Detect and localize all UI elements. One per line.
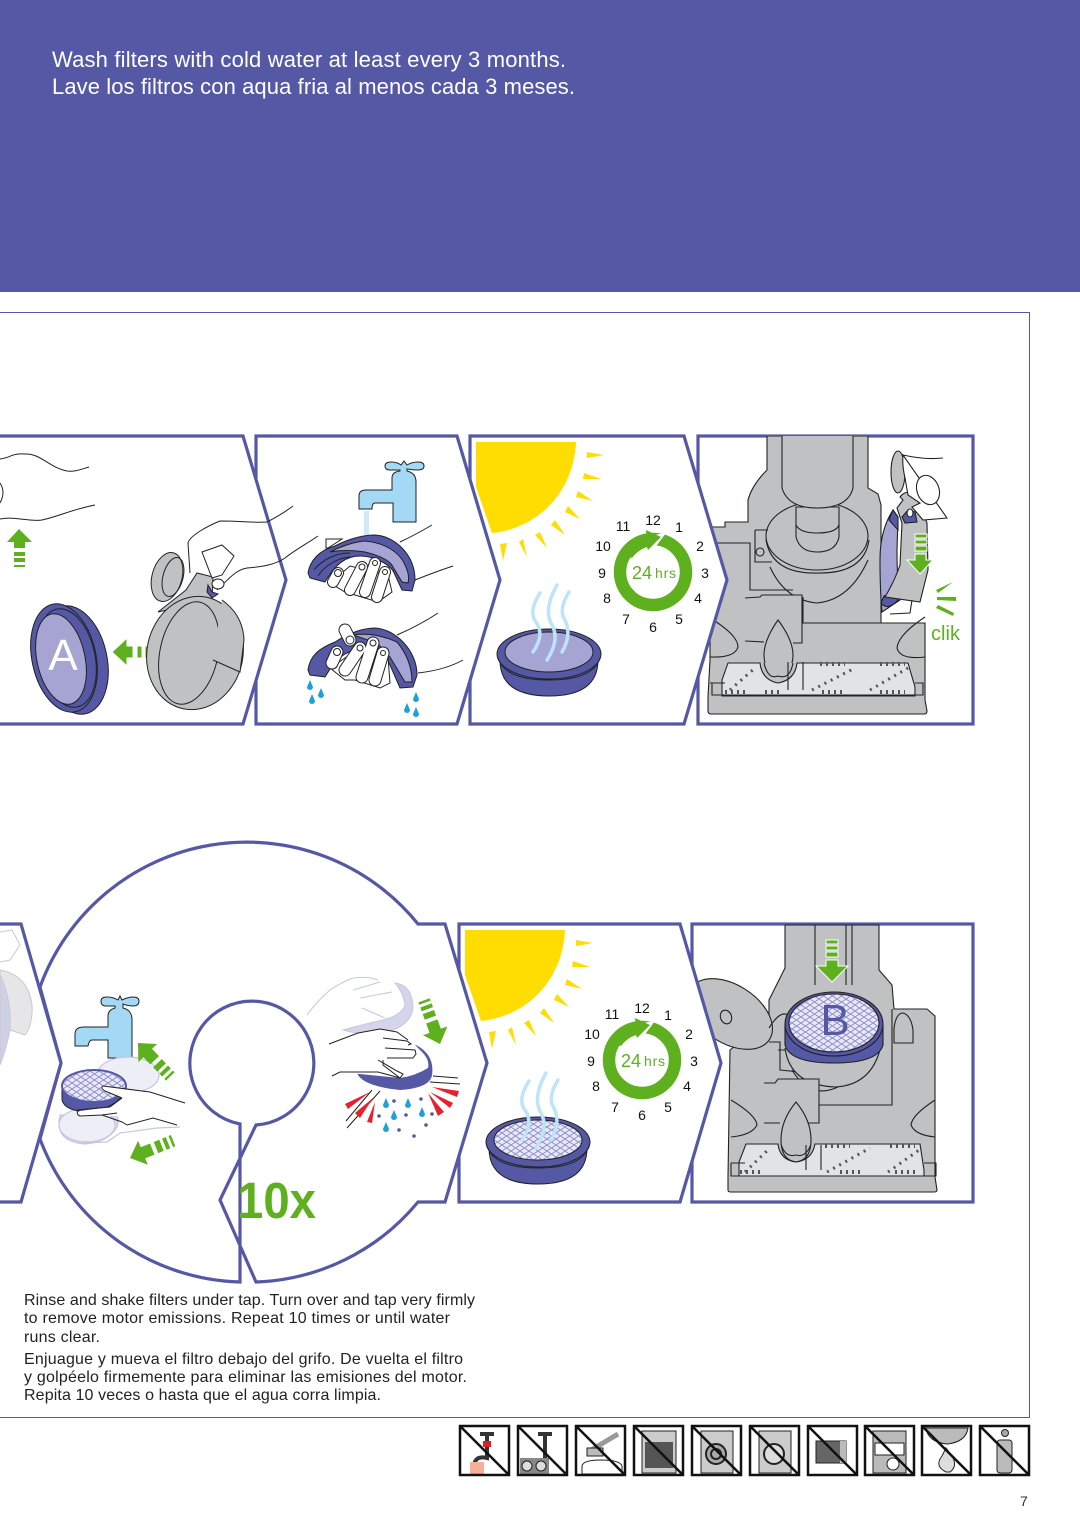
10x label: 10x xyxy=(237,1172,316,1229)
faded illustration xyxy=(0,930,32,1065)
clock: 24 hrs: hrs xyxy=(644,1053,665,1069)
clock: 24 hrs: 11 xyxy=(616,518,630,534)
clock: 24 hrs: 9 xyxy=(598,565,606,581)
filter B drying xyxy=(486,1117,590,1184)
title xyxy=(52,47,575,99)
clock: 24 hrs: 2 xyxy=(696,538,704,554)
vacuum illustration xyxy=(675,925,937,1192)
clock: 24 hrs: 3 xyxy=(690,1053,698,1069)
hands holding filter, lower xyxy=(308,613,463,688)
clock: 24 hrs: 5 xyxy=(664,1099,672,1115)
sun xyxy=(476,442,604,561)
icon: no spray xyxy=(980,1426,1029,1475)
clock: 24 hrs: 10 xyxy=(595,538,611,554)
warning icons row xyxy=(460,1426,1029,1475)
title: Lave los filtros con aqua fria al menos cada 3 meses. xyxy=(52,74,575,99)
panel: refit filter A xyxy=(698,436,973,724)
clock: 24 hrs: 3 xyxy=(701,565,709,581)
clock: 24 hrs: 6 xyxy=(638,1107,646,1123)
icon: tap xyxy=(75,996,139,1058)
letter B: B xyxy=(820,996,850,1045)
panel: rinse and shake circle xyxy=(40,842,487,1282)
water drops and dots xyxy=(377,1097,434,1138)
filter drying xyxy=(497,629,601,696)
clock: 24 hrs: 7 xyxy=(622,611,630,627)
vacuum illustration xyxy=(708,436,947,714)
instructions text: y golpéelo firmemente para eliminar las emisiones del motor. xyxy=(24,1369,467,1386)
icon: no tumble dryer xyxy=(750,1426,799,1475)
instructions text: Rinse and shake filters under tap. Turn over and tap very firmly xyxy=(24,1292,475,1309)
filter and hand rinsing xyxy=(62,1070,185,1125)
icon: no washing machine spin xyxy=(692,1426,741,1475)
clock: 24 hrs xyxy=(595,512,709,635)
arrow: up xyxy=(7,529,32,567)
icon: no brush xyxy=(576,1426,625,1475)
steam xyxy=(522,1073,558,1148)
panel: rinse filter A xyxy=(256,436,500,724)
clock: 24 hrs: 11 xyxy=(605,1006,619,1022)
water stream xyxy=(364,511,369,549)
panel: remove filter A xyxy=(0,436,318,724)
clock: 24 hrs: 8 xyxy=(592,1078,600,1094)
clock: 24 hrs: 10 xyxy=(584,1026,600,1042)
icon: tap xyxy=(359,461,424,522)
clik label: clik xyxy=(931,623,961,645)
arrow: up-left xyxy=(129,1034,180,1085)
panel: faded previous step xyxy=(0,924,61,1202)
ghost hand and filter xyxy=(307,977,413,1034)
arrow: down xyxy=(907,534,933,574)
clock: 24 hrs: 24 xyxy=(632,563,652,583)
icon: no oven xyxy=(634,1426,683,1475)
clock: 24 hrs: 4 xyxy=(683,1078,691,1094)
clock: 24 hrs: 5 xyxy=(675,611,683,627)
arrow: down xyxy=(412,996,452,1048)
arrow: left xyxy=(112,638,154,666)
clock: 24 hrs: 4 xyxy=(694,590,702,606)
clock: 24 hrs: 1 xyxy=(675,519,683,535)
icon: no hot tap xyxy=(460,1426,509,1475)
panel: refit filter B xyxy=(675,924,973,1202)
icon: no dishwashing in bowl xyxy=(518,1426,567,1475)
instructions text: Enjuague y mueva el filtro debajo del grifo. De vuelta el filtro xyxy=(24,1351,463,1368)
clock: 24 hrs: 9 xyxy=(587,1053,595,1069)
instructions text: runs clear. xyxy=(24,1329,100,1346)
red shock marks xyxy=(345,1087,459,1123)
steam xyxy=(533,585,569,660)
clock: 24 hrs: 2 xyxy=(685,1026,693,1042)
title: Wash filters with cold water at least every 3 months. xyxy=(52,47,566,72)
clock: 24 hrs: 24 xyxy=(621,1051,641,1071)
instructions text xyxy=(24,1292,475,1404)
clock: 24 hrs: 7 xyxy=(611,1099,619,1115)
clock: 24 hrs: 1 xyxy=(664,1007,672,1023)
page number: 7 xyxy=(1020,1493,1028,1509)
filter and hand tapping xyxy=(329,1029,460,1128)
icon: no flame xyxy=(922,1426,971,1475)
filter A xyxy=(21,598,118,721)
clock: 24 hrs: 8 xyxy=(603,590,611,606)
clock: 24 hrs: 6 xyxy=(649,619,657,635)
ghost filters xyxy=(59,1057,180,1144)
icon: no microwave xyxy=(808,1426,857,1475)
instructions text: to remove motor emissions. Repeat 10 times or until water xyxy=(24,1310,451,1327)
click marks xyxy=(936,582,956,616)
clock: 24 hrs: hrs xyxy=(655,565,676,581)
instructions text: Repita 10 veces o hasta que el agua corra limpia. xyxy=(24,1387,381,1404)
icon: no dishwasher xyxy=(865,1426,914,1475)
hand outline xyxy=(0,454,95,520)
hands holding filter, upper xyxy=(308,525,453,602)
clock: 24 hrs: 12 xyxy=(634,1000,650,1016)
arrow: down xyxy=(816,940,848,982)
cover and hand xyxy=(136,506,318,719)
sun xyxy=(465,930,593,1049)
panel: dry 24 hours xyxy=(470,436,727,724)
clock: 24 hrs xyxy=(584,1000,698,1123)
letter A: A xyxy=(48,631,78,680)
water drops xyxy=(307,680,419,717)
arrow: down-left xyxy=(125,1129,178,1170)
panel: dry filter B 24 hours xyxy=(459,924,721,1202)
clock: 24 hrs: 12 xyxy=(645,512,661,528)
header band xyxy=(0,0,1080,292)
page frame xyxy=(0,312,1030,1418)
